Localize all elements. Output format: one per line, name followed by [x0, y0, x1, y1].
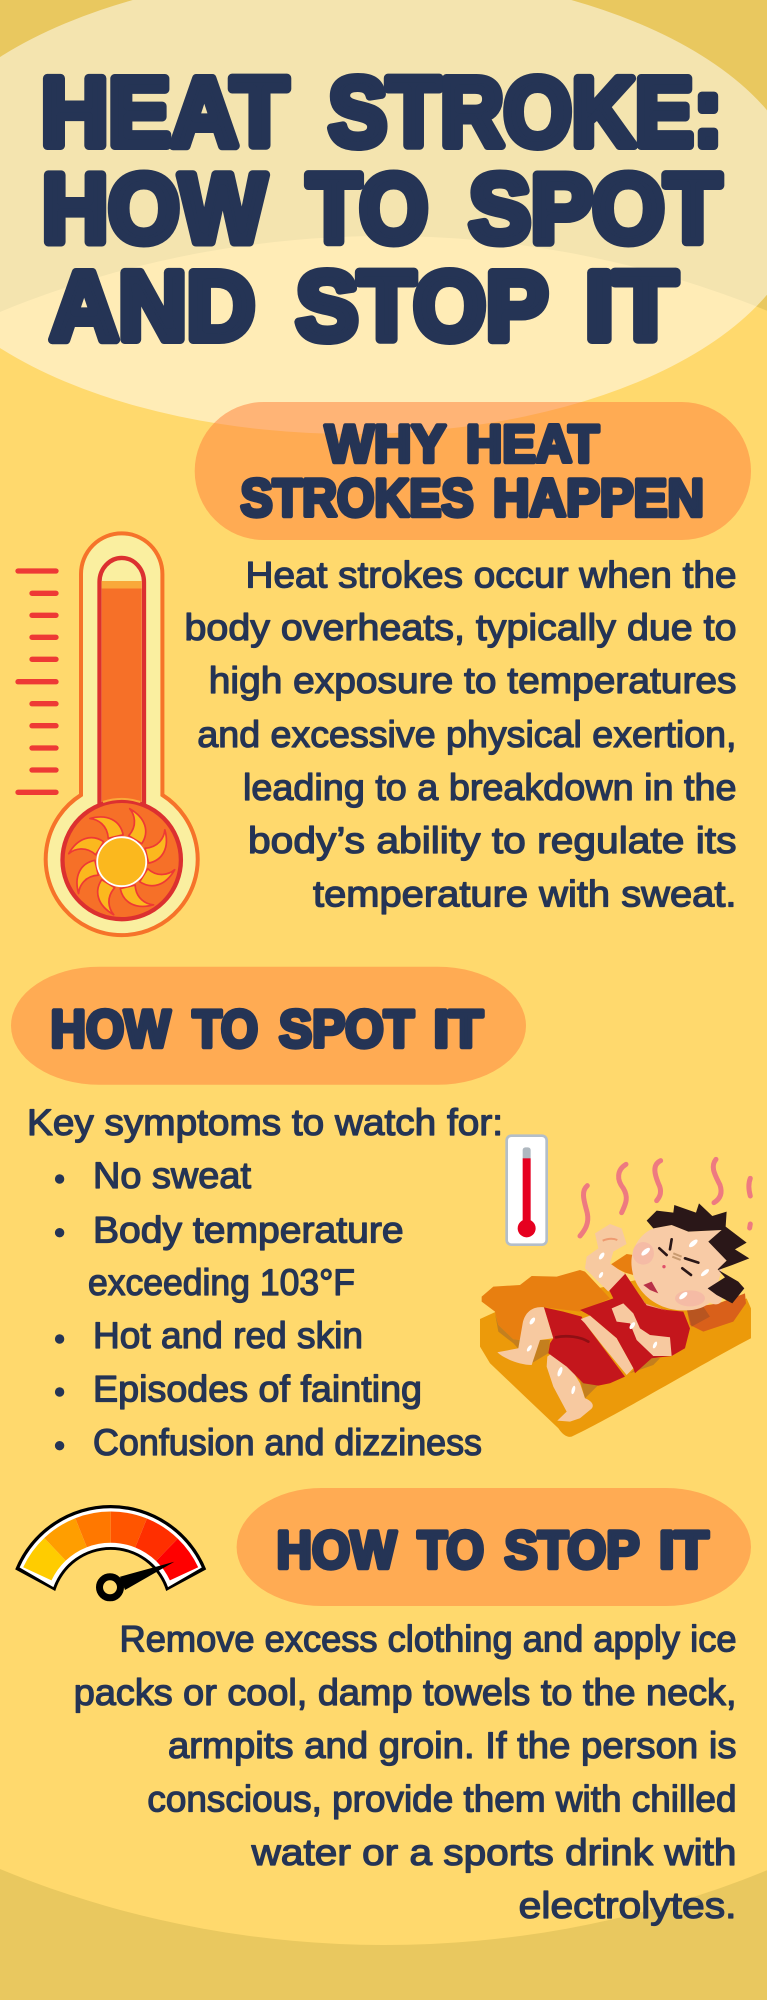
heading pill: how to stop it: HOW — [276, 1521, 396, 1580]
heading pill: how to spot it — [11, 967, 526, 1085]
icon: thermometer card — [507, 1136, 547, 1245]
panel: how to spot it — [11, 967, 751, 1463]
text block: why heat strokes happen: Heat strokes occur when the — [246, 554, 736, 595]
text block: why heat strokes happen: and excessive physical exertion, — [197, 714, 736, 755]
text block: how to stop it: Remove excess clothing and apply ice — [120, 1619, 736, 1660]
panel: how to stop it — [15, 1488, 751, 1926]
symptom list: Confusion and dizziness — [93, 1422, 482, 1463]
heading pill: why heat strokes happen — [195, 402, 751, 540]
panel: why heat strokes happen — [18, 402, 751, 935]
title: HOW — [42, 154, 266, 263]
text block: how to stop it: conscious, provide them with chilled — [147, 1779, 736, 1820]
text block: how to stop it: electrolytes. — [519, 1885, 736, 1926]
text block: why heat strokes happen: temperature with sweat. — [313, 874, 736, 915]
symptom list: Hot and red skin — [93, 1315, 363, 1356]
title: SPOT — [469, 154, 721, 263]
heading pill: why heat strokes happen: HEAT — [466, 415, 599, 474]
text block: why heat strokes happen: leading to a breakdown in the — [243, 767, 736, 808]
title — [41, 58, 722, 360]
heading pill: why heat strokes happen: STROKES — [240, 469, 474, 528]
icon: temperature gauge — [15, 1505, 206, 1598]
title: AND — [50, 252, 255, 360]
title: HEAT — [41, 58, 288, 166]
heading pill: how to stop it — [237, 1488, 751, 1606]
title: STROKE: — [328, 58, 722, 166]
text block: why heat strokes happen: body’s ability to regulate its — [248, 820, 736, 861]
symptom list: Body temperature — [93, 1210, 404, 1251]
text block: how to stop it: armpits and groin. If the person is — [168, 1725, 736, 1766]
text block: why heat strokes happen: high exposure to temperatures — [209, 660, 737, 701]
heading pill: how to spot it: TO — [192, 1000, 258, 1059]
heading pill: how to spot it: HOW — [50, 1000, 170, 1059]
text block: how to stop it — [74, 1619, 737, 1926]
text block: how to stop it: water or a sports drink with — [251, 1832, 736, 1873]
title: IT — [585, 252, 677, 360]
heat waves — [580, 1159, 750, 1236]
icon: thermometer with sun — [18, 533, 198, 935]
heading pill: how to stop it: IT — [659, 1521, 708, 1580]
text block: why heat strokes happen — [184, 554, 736, 915]
heading pill: how to spot it: SPOT — [279, 1000, 414, 1059]
symptom list: No sweat — [93, 1155, 252, 1196]
heading pill: why heat strokes happen: WHY — [325, 415, 446, 474]
text block: how to stop it: packs or cool, damp towels to the neck, — [74, 1672, 737, 1713]
heading pill: how to spot it: IT — [434, 1000, 483, 1059]
thermometer tick marks — [18, 571, 56, 792]
symptom list — [27, 1102, 503, 1463]
illustration: overheated person lying on a bed with thermometer card — [480, 1136, 751, 1437]
person on bed — [480, 1203, 751, 1437]
heading pill: how to stop it: TO — [418, 1521, 484, 1580]
title: STOP — [296, 252, 548, 360]
text block: why heat strokes happen: body overheats, typically due to — [184, 607, 736, 648]
title: TO — [307, 154, 428, 263]
heading pill: why heat strokes happen: HAPPEN — [493, 469, 704, 528]
symptom list: exceeding 103°F — [88, 1262, 355, 1303]
symptom list: Key symptoms to watch for: — [27, 1102, 503, 1143]
symptom list: Episodes of fainting — [93, 1369, 422, 1410]
heading pill: how to stop it: STOP — [504, 1521, 640, 1580]
